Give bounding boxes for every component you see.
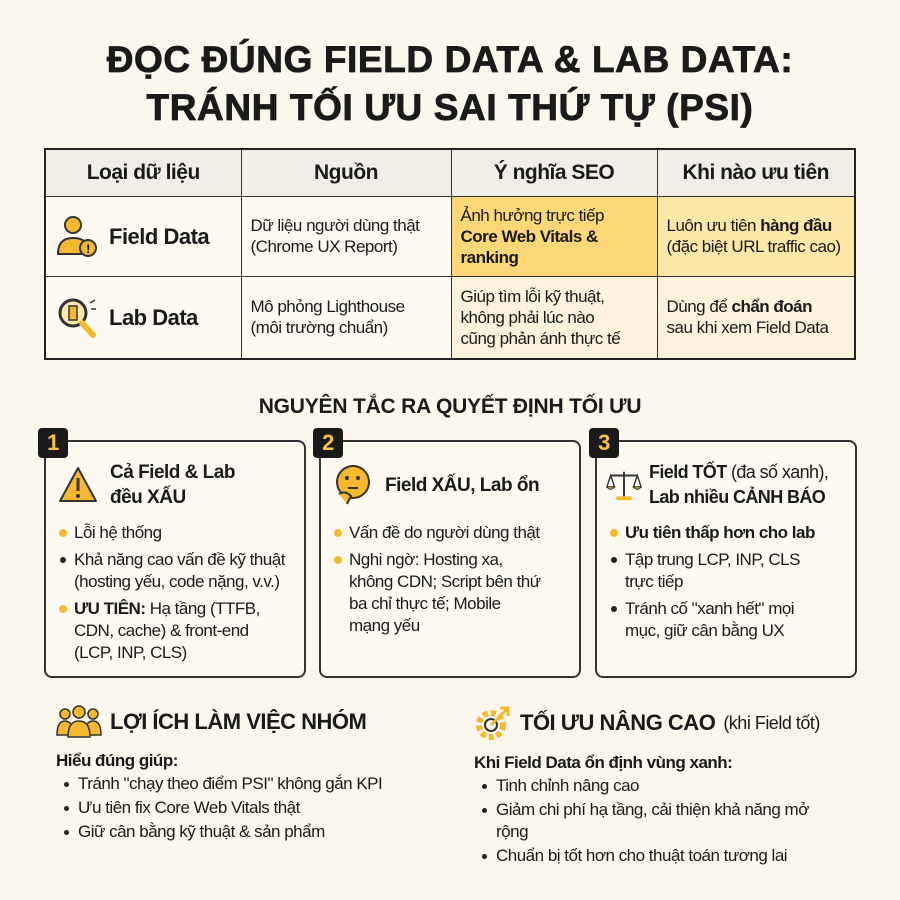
card 1: (LCP, INP, CLS) (74, 643, 187, 662)
section heading: NGUYÊN TẮC RA QUYẾT ĐỊNH TỐI ƯU (259, 395, 641, 418)
panel: advanced optimization: Chuẩn bị tốt hơn cho thuật toán tương lai (496, 846, 787, 865)
comparison table: Dùng để chẩn đoán (666, 297, 812, 316)
card 1 (44, 440, 306, 678)
comparison table: Luôn ưu tiên hàng đầu (đặc biệt URL traffic cao) (666, 216, 841, 256)
panel: advanced optimization (474, 706, 820, 865)
card 2: Field XẤU, Lab ổn (385, 474, 539, 496)
card 1: Lỗi hệ thống (74, 523, 162, 542)
comparison table: Core Web Vitals & ranking (460, 226, 598, 266)
badge 2: 2 (322, 430, 334, 455)
icon: magnifier (58, 298, 96, 338)
card 1: ƯU TIÊN: Hạ tầng (TTFB, (74, 599, 260, 618)
comparison table: Giúp tìm lỗi kỹ thuật, (460, 287, 604, 306)
comparison table: Loại dữ liệu (87, 161, 200, 184)
card 1: đều XẤU (110, 487, 186, 508)
card 2: mạng yếu (349, 616, 420, 635)
comparison table: Field Data (109, 224, 209, 248)
card 2 (319, 440, 581, 678)
comparison table: cũng phản ánh thực tế (460, 329, 620, 348)
card 1: CDN, cache) & front-end (74, 621, 249, 640)
panel: team benefits: Ưu tiên fix Core Web Vitals thật (78, 798, 300, 817)
comparison table (44, 148, 856, 360)
comparison table: Nguồn (314, 161, 378, 184)
card 2: Nghi ngờ: Hosting xa, (349, 550, 503, 569)
icon: user: ! (86, 242, 90, 256)
icon: thinking face (336, 465, 370, 504)
panel: advanced optimization: TỐI ƯU NÂNG CAO (520, 710, 715, 735)
panel: team benefits: Giữ cân bằng kỹ thuật & sản phẩm (78, 822, 325, 841)
icon: scales (606, 472, 642, 500)
comparison table: không phải lúc nào (460, 308, 594, 327)
comparison table: Mô phỏng Lighthouse (250, 297, 405, 316)
comparison table: Ảnh hưởng trực tiếp (460, 206, 604, 224)
card 2: Vấn đề do người dùng thật (349, 523, 540, 542)
icon: warning (59, 467, 97, 502)
badge 3: 3 (598, 430, 610, 455)
card 3: Tập trung LCP, INP, CLS trực tiếp (625, 550, 800, 591)
panel: advanced optimization: Khi Field Data ổn định vùng xanh: (474, 753, 732, 772)
badge 3 (589, 428, 619, 458)
title: TRÁNH TỐI ƯU SAI THỨ TỰ (PSI) (147, 87, 753, 128)
comparison table: Ý nghĩa SEO (494, 161, 614, 184)
panel: team benefits: Tránh "chạy theo điểm PSI" không gắn KPI (78, 774, 382, 793)
card 3 (595, 440, 857, 678)
card 2: ba chỉ thực tế; Mobile (349, 594, 501, 613)
badge 1: 1 (47, 430, 59, 455)
comparison table: (môi trường chuẩn) (250, 318, 388, 337)
card 1: Khả năng cao vấn đề kỹ thuật (hosting yếu, code nặng, v.v.) (74, 550, 285, 591)
panel: team benefits: LỢI ÍCH LÀM VIỆC NHÓM (110, 709, 366, 734)
panel: advanced optimization: (khi Field tốt) (723, 712, 820, 732)
card 3: Tránh cố "xanh hết" mọi mục, giữ cân bằng UX (625, 599, 794, 640)
comparison table: Khi nào ưu tiên (682, 161, 829, 184)
title (106, 38, 793, 128)
badge 2 (313, 428, 343, 458)
icon: user (57, 216, 97, 257)
card 1: Cả Field & Lab (110, 462, 235, 483)
card 3: Lab nhiều CẢNH BÁO (649, 487, 825, 507)
comparison table: Dữ liệu người dùng thật (Chrome UX Report) (250, 216, 419, 256)
card 3: Field TỐT (đa số xanh), (649, 462, 828, 482)
card 2: không CDN; Script bên thứ (349, 572, 541, 591)
title: ĐỌC ĐÚNG FIELD DATA & LAB DATA: (107, 39, 793, 80)
card 3: Ưu tiên thấp hơn cho lab (625, 523, 815, 542)
icon: team (56, 705, 102, 738)
panel: advanced optimization: Giảm chi phí hạ tầng, cải thiện khả năng mở rộng (496, 800, 809, 841)
comparison table: sau khi xem Field Data (666, 318, 828, 337)
comparison table: Lab Data (109, 305, 198, 330)
panel: advanced optimization: Tinh chỉnh nâng cao (496, 776, 639, 795)
panel: team benefits (56, 705, 382, 841)
panel: team benefits: Hiểu đúng giúp: (56, 751, 178, 770)
icon: gear arrow (476, 706, 510, 740)
badge 1 (38, 428, 68, 458)
